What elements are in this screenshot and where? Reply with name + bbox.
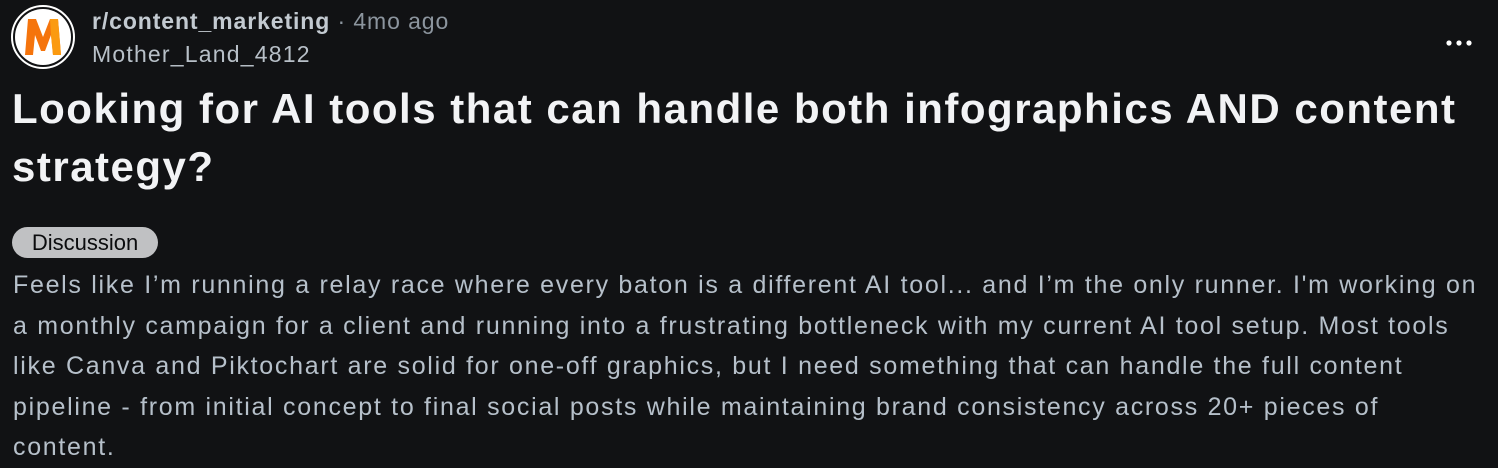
- body text: Feels like I’m running a relay race where every baton is a different AI tool... and I’m the only runner. I'm working on: [13, 271, 1477, 299]
- tag: Discussion: Discussion: [32, 230, 138, 255]
- body text: content.: [13, 433, 116, 461]
- avatar icon: [11, 5, 75, 69]
- tag: Discussion: [12, 227, 158, 258]
- username: Mother_Land_4812: [92, 41, 311, 67]
- title: Looking for AI tools that can handle both infographics AND content: [12, 85, 1457, 132]
- title: [12, 85, 1457, 190]
- body text: a monthly campaign for a client and running into a frustrating bottleneck with my current AI tool setup. Most tools: [13, 312, 1449, 340]
- subreddit and time: r/content_marketing · 4mo ago: [92, 8, 449, 34]
- title: strategy?: [12, 143, 215, 190]
- body text: [13, 271, 1477, 461]
- body text: pipeline - from initial concept to final social posts while maintaining brand consistency across 20+ pieces of: [13, 392, 1379, 420]
- more menu icon: [1446, 40, 1472, 46]
- body text: like Canva and Piktochart are solid for one-off graphics, but I need something that can handle the full content: [13, 352, 1403, 380]
